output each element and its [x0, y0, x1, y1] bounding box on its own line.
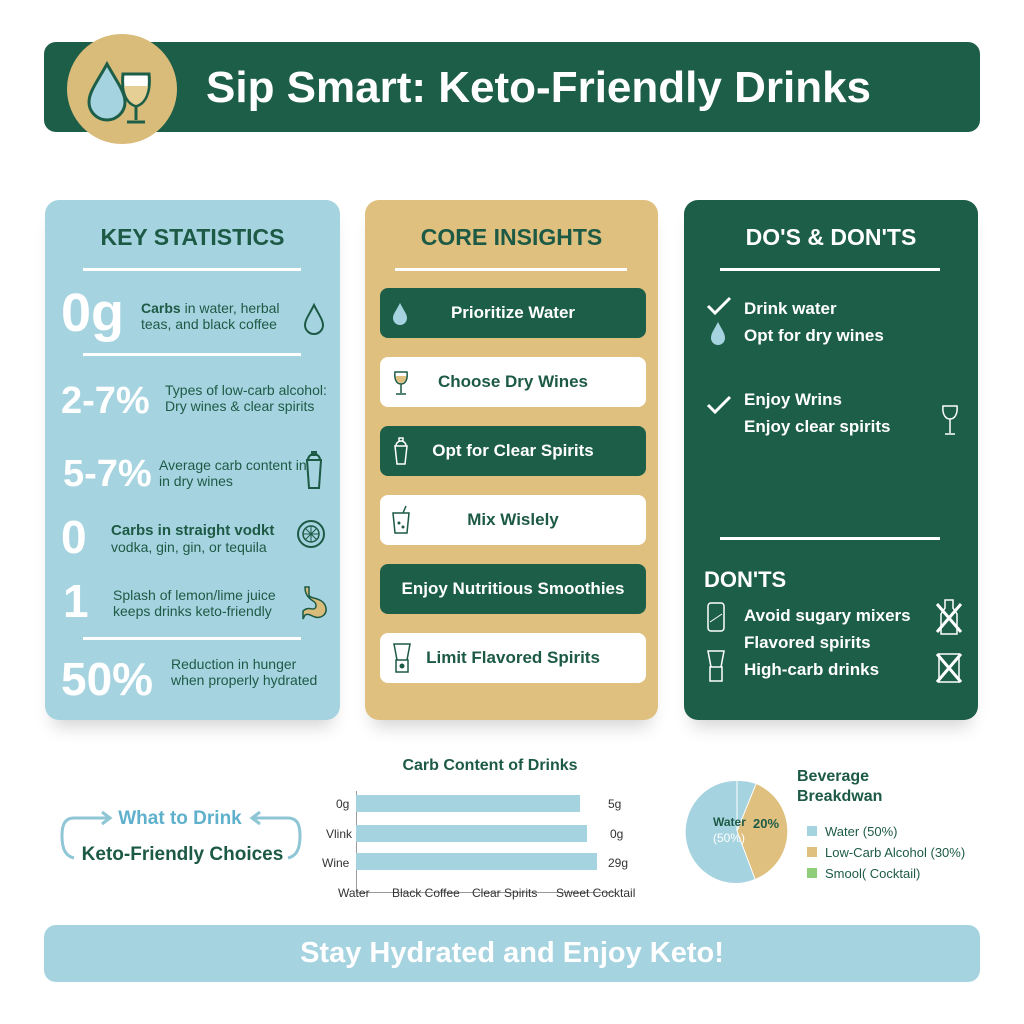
panel: key statistics: vodka, gin, gin, or tequila	[111, 539, 267, 555]
do's list: Drink water	[744, 299, 837, 318]
bar chart: carb content: 29g	[608, 856, 628, 870]
bar chart: carb content: Black Coffee	[392, 886, 460, 900]
panel: key statistics: keeps drinks keto-friendly	[113, 603, 272, 619]
bar chart: carb content	[322, 757, 635, 900]
panel: key statistics: 0g	[61, 283, 124, 343]
button: limit flavored spirits	[380, 633, 646, 683]
pie chart: beverage breakdown: Water (50%)	[825, 824, 897, 839]
button: opt for clear spirits	[380, 426, 646, 476]
bar chart: carb content: Vlink	[326, 827, 352, 841]
footer banner: Stay Hydrated and Enjoy Keto!	[300, 937, 724, 969]
button: opt for clear spirits: Opt for Clear Spirits	[432, 441, 594, 460]
what to drink callout: What to Drink	[118, 808, 242, 829]
title: Sip Smart: Keto-Friendly Drinks	[206, 63, 871, 112]
do's list: Opt for dry wines	[744, 326, 884, 345]
panel: key statistics: 0	[61, 511, 87, 563]
footer banner	[44, 925, 980, 982]
panel: key statistics: 5-7%	[63, 453, 152, 495]
pie chart: beverage breakdown: Water	[713, 815, 746, 829]
pie chart: beverage breakdown: Smool( Cocktail)	[825, 866, 920, 881]
button: nutritious smoothies: Enjoy Nutritious Smoothies	[402, 579, 624, 598]
pie chart: beverage breakdown: (50%)	[713, 831, 745, 845]
button: choose dry wines	[380, 357, 646, 407]
do's list	[707, 297, 958, 436]
pie chart: beverage breakdown	[686, 768, 965, 883]
panel: key statistics: Types of low-carb alcohol:	[165, 382, 327, 398]
bar chart: carb content: 5g	[608, 797, 621, 811]
bar chart: carb content: Water	[338, 886, 370, 900]
panel: key statistics	[45, 200, 340, 720]
do's list: Enjoy clear spirits	[744, 417, 890, 436]
panel: key statistics: Reduction in hunger	[171, 656, 296, 672]
panel: key statistics: 2-7%	[61, 380, 150, 422]
panel: key statistics: Carbs in straight vodkt	[111, 522, 274, 539]
panel: core insights: CORE INSIGHTS	[421, 224, 602, 250]
button: choose dry wines: Choose Dry Wines	[438, 372, 588, 391]
pie chart: beverage breakdown: Beverage	[797, 768, 869, 785]
don'ts list: Avoid sugary mixers	[744, 606, 911, 625]
pie chart: beverage breakdown: Low-Carb Alcohol (30%)	[825, 845, 965, 860]
don'ts list	[707, 599, 962, 683]
panel: key statistics: Average carb content in	[159, 457, 307, 473]
button: nutritious smoothies	[380, 564, 646, 614]
panel: key statistics: Dry wines & clear spirits	[165, 398, 314, 414]
button: mix wisely: Mix Wislely	[467, 510, 559, 529]
header banner	[44, 42, 980, 132]
don'ts list: High-carb drinks	[744, 660, 879, 679]
panel: do's and don'ts: DO'S & DON'TS	[746, 224, 916, 250]
button: limit flavored spirits: Limit Flavored Spirits	[426, 648, 600, 667]
button: prioritize water: Prioritize Water	[451, 303, 575, 322]
bar chart: carb content: Carb Content of Drinks	[402, 757, 578, 774]
panel: core insights	[365, 200, 658, 720]
what to drink callout: Keto-Friendly Choices	[82, 844, 283, 865]
panel: do's and don'ts	[684, 200, 978, 720]
pie chart: beverage breakdown: 20%	[753, 816, 779, 831]
panel: key statistics: in dry wines	[159, 473, 233, 489]
icon: water drop and wine glass	[67, 34, 177, 144]
button: mix wisely	[380, 495, 646, 545]
bar chart: carb content: 0g	[610, 827, 623, 841]
panel: do's and don'ts: DON'TS	[704, 567, 786, 592]
bar chart: carb content: Clear Spirits	[472, 886, 537, 900]
bar chart: carb content: 0g	[336, 797, 349, 811]
panel: key statistics: 1	[63, 575, 89, 627]
button: prioritize water	[380, 288, 646, 338]
panel: key statistics: Carbs in water, herbal	[141, 300, 280, 316]
do's list: Enjoy Wrins	[744, 390, 842, 409]
panel: key statistics: 50%	[61, 653, 153, 705]
panel: key statistics: when properly hydrated	[171, 672, 317, 688]
don'ts list: Flavored spirits	[744, 633, 871, 652]
bar chart: carb content: Sweet Cocktail	[556, 886, 635, 900]
what to drink callout	[60, 808, 302, 865]
panel: key statistics: Splash of lemon/lime juice	[113, 587, 276, 603]
bar chart: carb content: Wine	[322, 856, 349, 870]
panel: key statistics: teas, and black coffee	[141, 316, 277, 332]
panel: key statistics: KEY STATISTICS	[100, 224, 285, 250]
pie chart: beverage breakdown: Breakdwan	[797, 788, 882, 805]
